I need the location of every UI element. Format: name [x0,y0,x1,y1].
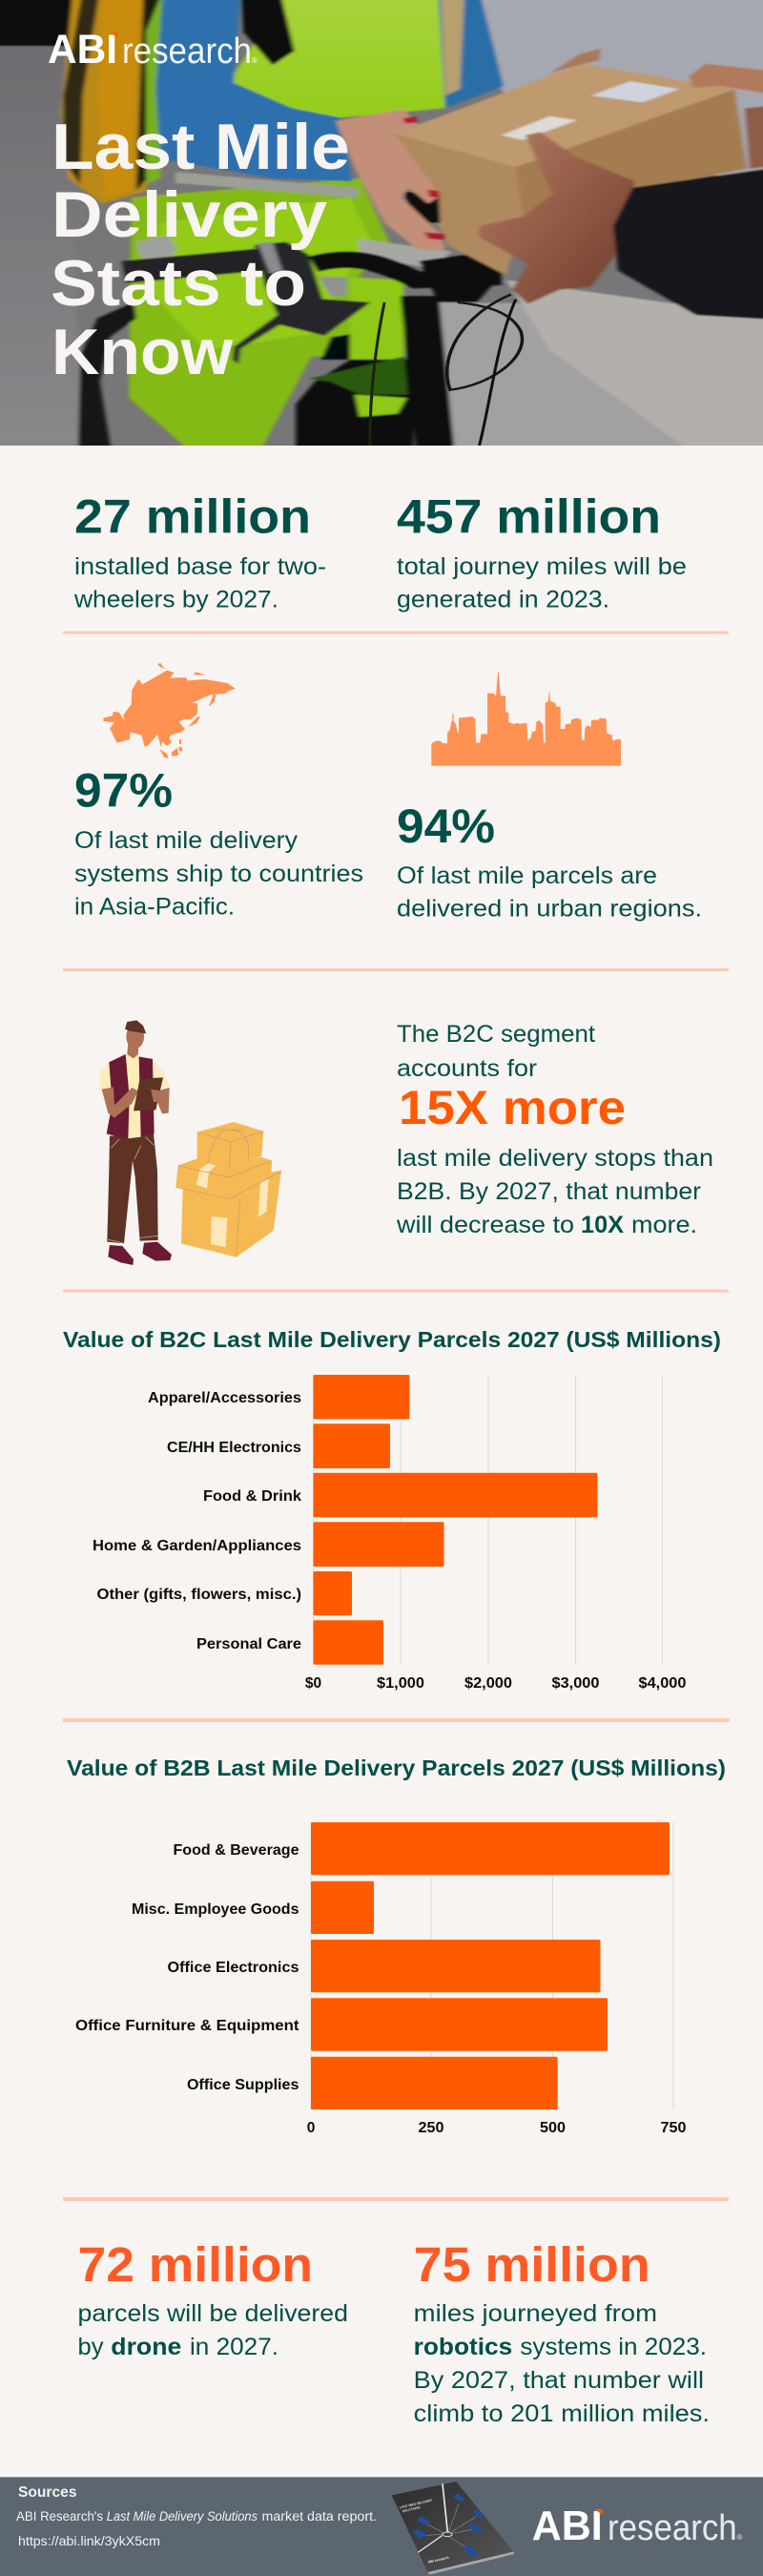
text: B2C segment 15X more: B2B. By 2027, that number [397,1178,701,1205]
stat: 94%: Of last mile parcels are [397,862,657,889]
illustration: courier with clipboard [99,1020,172,1265]
footer logo: ABI research [532,2503,742,2549]
bar chart: B2B parcels: 0 [307,2120,315,2136]
footer logo: ABI research: research [608,2508,737,2548]
bar chart: B2B parcels: Office Electronics [168,1960,299,1976]
stat: 97%: 97% [74,763,173,817]
bar chart: B2B parcels: 500 [540,2120,566,2136]
bar chart: B2B parcels: 750 [660,2120,687,2136]
text: B2C segment 15X more: accounts for [397,1055,537,1082]
title: Last Mile [52,111,350,183]
hero logo: ABI research: ABI [48,27,117,73]
bar chart: B2C parcels [93,1375,687,1692]
stat: 72 million: drone [111,2334,181,2360]
footer sources text: ABI Research's [16,2509,103,2524]
footer sources text: https://abi.link/3ykX5cm [18,2534,160,2548]
bar chart: B2C parcels: $3,000 [551,1675,599,1692]
stat: 97% [74,763,363,920]
stat: 97%: in Asia-Pacific. [74,893,235,920]
stat: 457 million: generated in 2023. [397,586,609,613]
stat: 27 million: 27 million [74,490,311,544]
stat: 27 million [73,490,326,613]
stat: 75 million: 75 million [414,2237,650,2292]
hero photo: courier handing over a parcel [0,0,763,446]
footer sources text [16,2484,377,2548]
stat: 457 million [397,490,687,613]
stat: 94%: delivered in urban regions. [397,895,702,922]
heading: B2C chart title: Value of B2C Last Mile Delivery Parcels 2027 (US$ Millions) [63,1327,721,1352]
bar chart: B2B parcels [75,1822,687,2136]
report cover image: SOLUTIONS [402,2505,422,2513]
report cover image: ABI research [427,2556,449,2565]
report cover image [392,2482,514,2575]
title: Know [52,316,234,388]
stat: 75 million: systems in 2023. [520,2334,707,2360]
stat: 72 million: in 2027. [190,2334,278,2360]
bar chart: B2B parcels: Misc. Employee Goods [132,1901,299,1918]
heading: B2B chart title: Value of B2B Last Mile Delivery Parcels 2027 (US$ Millions) [67,1755,726,1780]
stat: 27 million: installed base for two- [74,553,326,580]
text: B2C segment 15X more: last mile delivery stops than [397,1145,713,1172]
bar chart: B2C parcels: Home & Garden/Appliances [93,1538,301,1554]
stat: 72 million: by [78,2334,104,2360]
text: B2C segment 15X more: 10X [581,1212,624,1238]
footer logo: ABI research: ABI [532,2503,603,2549]
hero logo: ABI research: research [122,31,252,72]
title: Delivery [52,178,327,251]
title: Stats to [51,247,306,320]
stat: 27 million: wheelers by 2027. [73,586,278,613]
bar chart: B2C parcels: Personal Care [196,1636,301,1652]
footer logo: ABI research: ® [736,2533,742,2542]
icon: Asia map [103,663,236,758]
footer sources text: Last Mile Delivery Solutions [107,2509,258,2524]
stat: 75 million: climb to 201 million miles. [414,2400,710,2427]
stat: 72 million: 72 million [78,2237,313,2292]
bar chart: B2C parcels: $0 [305,1675,321,1692]
bar chart: B2C parcels: $1,000 [377,1675,424,1692]
bar chart: B2C parcels: Food & Drink [203,1488,301,1505]
stat: 75 million: miles journeyed from [414,2300,657,2327]
bar chart: B2C parcels: $4,000 [639,1675,687,1692]
stat: 72 million: parcels will be delivered [78,2300,348,2327]
bar chart: B2B parcels: Office Furniture & Equipment [75,2018,299,2034]
hero logo: ABI research [48,27,258,73]
stat: 457 million: 457 million [397,490,661,544]
footer sources text: market data report. [261,2509,377,2524]
stat: 97%: Of last mile delivery [74,827,299,854]
stat: 75 million: By 2027, that number will [414,2367,704,2394]
text: B2C segment 15X more: 15X more [399,1081,626,1134]
hero logo: ABI research: ® [252,56,258,65]
bar chart: B2B parcels: 250 [418,2120,444,2136]
stat: 94%: 94% [397,800,495,853]
stat: 75 million: robotics [414,2334,512,2360]
text: B2C segment 15X more: more. [631,1212,697,1238]
text: B2C segment 15X more [396,1021,713,1238]
bar chart: B2C parcels: Apparel/Accessories [148,1390,301,1406]
icon: city skyline [431,672,621,766]
bar chart: B2B parcels: Food & Beverage [174,1842,299,1859]
stat: 75 million [414,2237,710,2427]
footer sources text: Sources [18,2484,76,2501]
stat: 94% [397,800,702,922]
stat: 457 million: total journey miles will be [397,553,687,580]
illustration: stacked parcels [175,1122,282,1257]
bar chart: B2C parcels: Other (gifts, flowers, misc.) [97,1587,301,1603]
footer band [0,2477,763,2576]
text: B2C segment 15X more: The B2C segment [397,1021,595,1048]
bar chart: B2C parcels: CE/HH Electronics [167,1440,301,1456]
title [51,111,350,388]
bar chart: B2C parcels: $2,000 [464,1675,512,1692]
report cover image: LAST MILE DELIVERY [400,2498,433,2509]
text: B2C segment 15X more: will decrease to [396,1212,574,1238]
stat: 97%: systems ship to countries [74,861,363,887]
stat: 72 million [78,2237,348,2360]
bar chart: B2B parcels: Office Supplies [187,2077,299,2093]
